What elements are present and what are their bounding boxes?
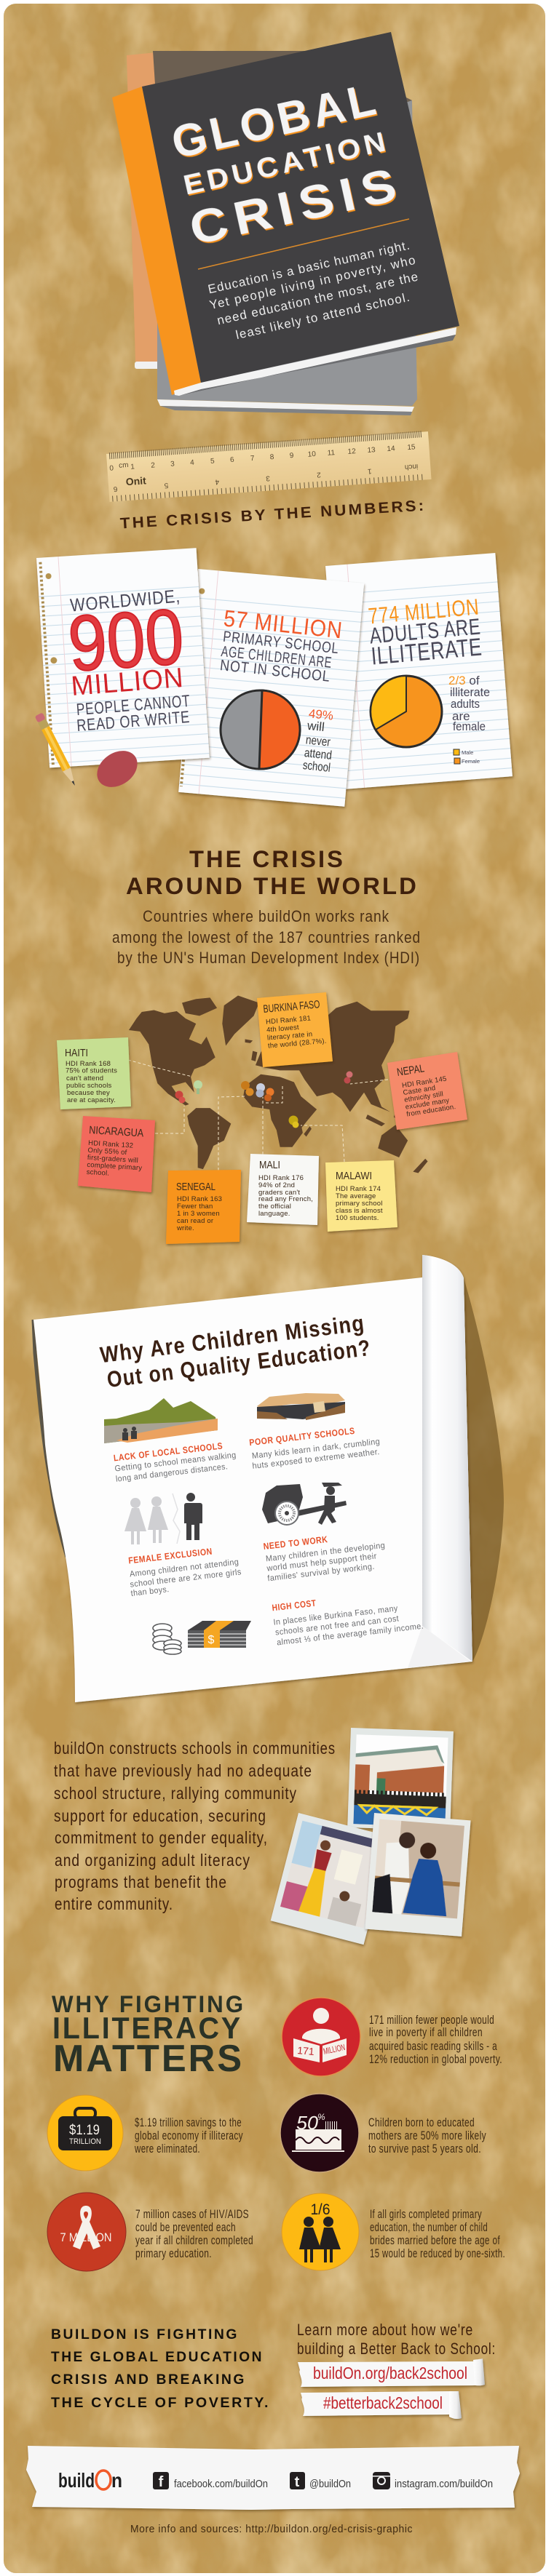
icon: briefcase: TRILLION xyxy=(69,2137,101,2146)
item: lack of local schools: Getting to school means walking xyxy=(114,1451,237,1473)
call to action: buildOn is fighting: THE CYCLE OF POVERTY. xyxy=(51,2396,270,2411)
facebook link: facebook.com/buildOn xyxy=(174,2478,268,2490)
facebook link xyxy=(153,2472,268,2490)
pie legend xyxy=(454,749,480,765)
item: need to work: families' survival by working. xyxy=(267,1563,375,1583)
sticky note: Haiti: are at capacity. xyxy=(67,1096,116,1104)
pie caption: never xyxy=(305,733,331,749)
heading: why fighting illiteracy matters: ILLITERACY xyxy=(52,2011,242,2045)
sticky note: Haiti: public schools xyxy=(66,1082,112,1090)
ruler: Onit xyxy=(125,474,147,487)
item: poor quality schools: POOR QUALITY SCHOOLS xyxy=(249,1426,355,1448)
heading: why fighting illiteracy matters: MATTERS xyxy=(53,2038,244,2080)
text block: what buildOn does: programs that benefit the xyxy=(55,1873,227,1891)
sticky note: Malawi: class is almost xyxy=(336,1207,383,1215)
item: female exclusion: than boys. xyxy=(130,1585,170,1598)
ruler: 6 xyxy=(230,456,234,464)
item: high cost xyxy=(153,1598,424,1654)
stat: $1.19 trillion xyxy=(47,2095,243,2171)
book title: GLOBAL xyxy=(167,74,384,168)
stat text xyxy=(367,594,483,671)
photo: school building xyxy=(347,1728,454,1831)
photo: girl in blue dress xyxy=(365,1813,471,1937)
stat: $1.19 trillion: $1.19 trillion savings to the xyxy=(135,2116,242,2129)
sticky note: Nepal: from education. xyxy=(406,1103,456,1119)
book subtitle: least likely to attend school. xyxy=(234,290,411,342)
sticky note: Burkina Faso: BURKINA FASO xyxy=(263,998,320,1016)
pie caption: 2/3 of xyxy=(448,674,480,687)
book title xyxy=(167,74,408,255)
front book xyxy=(112,32,459,396)
sticky note: Mali: HDI Rank 176 xyxy=(258,1174,304,1182)
stat text: WORLDWIDE, xyxy=(69,586,181,616)
back book: grey xyxy=(157,100,417,415)
sticky note: Senegal: 1 in 3 women xyxy=(177,1210,220,1218)
pie caption: adults xyxy=(451,697,480,711)
sticky note: Nepal: ethnicity still xyxy=(403,1090,444,1104)
book subtitle xyxy=(207,239,419,342)
facebook link: f xyxy=(159,2474,164,2490)
item: female exclusion: school there are 2x more girls xyxy=(130,1568,242,1590)
twitter link xyxy=(290,2472,351,2490)
book subtitle: Yet people living in poverty, who xyxy=(208,253,416,312)
sticky note: Senegal: SENEGAL xyxy=(176,1181,215,1193)
panel: why are children missing out xyxy=(33,1255,504,1702)
stat text: PRIMARY SCHOOL xyxy=(222,629,340,657)
stat text: 900 xyxy=(66,592,186,687)
ruler: inch xyxy=(405,462,419,471)
item: high cost: schools are not free and can cost xyxy=(274,1614,400,1638)
sticky note: Nicaragua: first-graders will xyxy=(87,1154,138,1165)
sheet heading: Why Are Children Missing xyxy=(98,1310,366,1368)
item: high cost: almost ⅓ of the average family income. xyxy=(277,1622,424,1647)
ruler: 12 xyxy=(347,447,357,456)
intro text: among the lowest of the 187 countries ranked xyxy=(112,928,421,946)
book subtitle: Education is a basic human right. xyxy=(207,239,411,296)
sticky note: Malawi: HDI Rank 174 xyxy=(336,1185,381,1193)
stat: 50 percent xyxy=(280,2094,486,2172)
text block: what buildOn does: entire community. xyxy=(55,1894,173,1913)
stat text: ADULTS ARE xyxy=(368,613,482,649)
pie caption: school xyxy=(302,758,331,775)
sticky note: Mali: MALI xyxy=(259,1159,280,1171)
stat text: READ OR WRITE xyxy=(76,707,191,735)
ruler: 3 xyxy=(265,474,270,482)
instagram link xyxy=(373,2472,493,2490)
pie caption: female xyxy=(453,719,486,733)
pie caption: will xyxy=(306,719,325,734)
stat: 171 million xyxy=(282,1998,502,2076)
sticky note: Nepal: HDI Rank 145 xyxy=(401,1075,447,1090)
banner: website: buildOn.org/back2school xyxy=(313,2364,467,2382)
intro text: Countries where buildOn works rank xyxy=(143,907,389,925)
logo: buildOn: n xyxy=(111,2469,122,2492)
intro text: by the UN's Human Development Index (HDI) xyxy=(117,949,420,967)
stat text: PEOPLE CANNOT xyxy=(76,691,191,719)
item: high cost: HIGH COST xyxy=(272,1598,317,1613)
text block: what buildOn does: that have previously had no adequate xyxy=(54,1761,312,1780)
sticky note: Haiti: can't attend xyxy=(66,1074,103,1082)
stat: 171 million: live in poverty if all children xyxy=(369,2026,483,2039)
stat: one sixth: If all girls completed primary xyxy=(370,2208,482,2221)
stat: 7 million: 7 million cases of HIV/AIDS xyxy=(135,2208,249,2221)
sticky note: Mali: the official xyxy=(258,1203,291,1211)
ruler: 11 xyxy=(327,449,336,458)
sticky note: Senegal: can read or xyxy=(177,1217,213,1225)
book subtitle: need education the most, are the xyxy=(215,270,419,327)
photo: classroom teacher xyxy=(271,1813,392,1945)
icon: briefcase xyxy=(47,2095,123,2171)
ruler: 8 xyxy=(270,453,274,461)
item: female exclusion xyxy=(124,1493,242,1598)
banner: hashtag xyxy=(301,2391,462,2419)
icon: reader with book xyxy=(282,1998,360,2076)
sticky note: Nepal xyxy=(387,1052,467,1130)
heading: why fighting illiteracy matters xyxy=(52,1991,245,2080)
sticky note: Nicaragua: HDI Rank 132 xyxy=(88,1139,133,1150)
item: need to work: Many children in the developing xyxy=(265,1542,386,1563)
icon: coins and cash xyxy=(153,1621,251,1654)
pie caption xyxy=(302,706,334,775)
sticky note: Haiti xyxy=(57,1037,131,1109)
sticky note: Malawi: primary school xyxy=(336,1200,383,1208)
intro text xyxy=(112,907,421,967)
sticky note: Haiti: because they xyxy=(67,1089,110,1097)
sticky note: Mali: read any French, xyxy=(258,1195,313,1203)
ruler: 0 xyxy=(109,464,114,473)
sources line: More info and sources: http://buildon.org/ed-crisis-graphic xyxy=(130,2523,413,2535)
icon: ribbon: 7 MILLION xyxy=(60,2230,112,2244)
stat text: MILLION xyxy=(70,663,185,702)
item: lack of local schools xyxy=(104,1398,237,1484)
icon: reader with book: 171 xyxy=(297,2044,315,2057)
book title: EDUCATION xyxy=(181,126,392,202)
sticky note: Mali: 94% of 2nd xyxy=(258,1181,295,1189)
stat text: ILLITERATE xyxy=(370,633,483,671)
sticky note: Nicaragua: school. xyxy=(86,1168,110,1178)
pie chart: never attend school xyxy=(221,690,300,769)
sticky note: Burkina Faso: HDI Rank 181 xyxy=(266,1014,311,1026)
sticky note: Burkina Faso: literacy rate in xyxy=(267,1030,313,1042)
ruler: 5 xyxy=(164,481,169,490)
ruler: 10 xyxy=(307,450,317,459)
sticky note: Senegal: HDI Rank 163 xyxy=(177,1195,222,1203)
stat text: NOT IN SCHOOL xyxy=(219,657,331,685)
back book: brown xyxy=(153,51,412,218)
note paper: 774 million xyxy=(325,553,513,789)
icon: birthday cake: 50 xyxy=(296,2112,319,2134)
stat text xyxy=(66,586,191,735)
sticky note: Nicaragua: NICARAGUA xyxy=(89,1124,144,1140)
stat: 7 million xyxy=(47,2193,253,2271)
item: female exclusion: Among children not attending xyxy=(129,1558,240,1579)
twitter link: @buildOn xyxy=(309,2478,351,2490)
stat: one sixth xyxy=(282,2193,505,2270)
item: poor quality schools xyxy=(249,1393,381,1471)
icon: birthday cake xyxy=(280,2094,359,2172)
sticky note: Malawi: The average xyxy=(336,1192,376,1200)
pie legend: Female xyxy=(462,758,480,765)
sticky note: Senegal xyxy=(166,1170,241,1244)
stat: one sixth: education, the number of child xyxy=(370,2221,488,2234)
sticky note: Malawi: MALAWI xyxy=(336,1170,372,1182)
icon: person pulling cart xyxy=(262,1483,347,1525)
stat text xyxy=(219,605,344,685)
text block: what buildOn does xyxy=(54,1739,336,1913)
sticky note: Haiti: HAITI xyxy=(65,1047,88,1059)
sticky note: Nicaragua: complete primary xyxy=(87,1161,143,1172)
item: high cost: In places like Burkina Faso, many xyxy=(273,1604,398,1627)
sticky note: Malawi xyxy=(325,1160,397,1232)
icon: eraser xyxy=(90,743,144,794)
world map xyxy=(129,996,428,1173)
item: lack of local schools: LACK OF LOCAL SCHOOLS xyxy=(113,1440,223,1464)
stat: 7 million: primary education. xyxy=(135,2247,212,2260)
ruler: 4 xyxy=(215,477,219,486)
sticky note: Nicaragua xyxy=(78,1116,155,1192)
ruler: 3 xyxy=(170,460,175,468)
text block: what buildOn does: buildOn constructs schools in communities xyxy=(54,1739,336,1758)
note paper: 900 million xyxy=(36,548,210,767)
sheet heading: Out on Quality Education? xyxy=(106,1335,372,1392)
stat: 171 million: acquired basic reading skills - a xyxy=(369,2040,497,2053)
sticky note: Malawi: 100 students. xyxy=(336,1214,379,1222)
stat: 50 percent: mothers are 50% more likely xyxy=(368,2129,486,2142)
heading: the crisis around the world xyxy=(126,846,419,899)
call to action: buildOn is fighting: CRISIS AND BREAKING xyxy=(51,2372,246,2388)
twitter link: t xyxy=(295,2474,300,2490)
sticky note: Nicaragua: Only 55% of xyxy=(87,1147,127,1157)
icon: birthday cake: % xyxy=(317,2112,325,2122)
ruler: 1 xyxy=(130,463,135,471)
text block: what buildOn does: commitment to gender equality, xyxy=(55,1828,268,1847)
ruler: 5 xyxy=(210,458,215,466)
stat: $1.19 trillion: global economy if illiteracy xyxy=(135,2129,243,2142)
ruler: 13 xyxy=(367,446,376,455)
ruler xyxy=(106,431,432,502)
sticky note: Senegal: write. xyxy=(176,1224,194,1232)
item: poor quality schools: Many kids learn in dark, crumbling xyxy=(252,1437,381,1461)
stat: 7 million: year if all children completed xyxy=(135,2234,253,2247)
heading: the crisis by the numbers: THE CRISIS BY THE NUMBERS: xyxy=(119,498,427,532)
pie caption xyxy=(448,674,490,733)
ruler: 2 xyxy=(316,471,321,479)
sticky note: Nepal: exclude many xyxy=(405,1096,450,1112)
call to action: buildOn is fighting: THE GLOBAL EDUCATION xyxy=(51,2350,264,2365)
sticky note: Burkina Faso: 4th lowest xyxy=(266,1024,299,1034)
instagram link: instagram.com/buildOn xyxy=(395,2478,493,2490)
pie legend: Male xyxy=(462,749,473,756)
sticky note: Senegal: Fewer than xyxy=(177,1203,213,1211)
map connector lines xyxy=(128,1060,388,1171)
text block: what buildOn does: school structure, rallying community xyxy=(54,1784,297,1803)
ruler: 1 xyxy=(367,467,372,475)
banner: hashtag: #betterback2school xyxy=(323,2393,443,2412)
item: need to work: NEED TO WORK xyxy=(263,1534,328,1552)
icon: crumbling hut xyxy=(257,1393,345,1420)
ruler: 6 xyxy=(113,485,118,493)
text: learn more: Learn more about how we're xyxy=(297,2321,473,2339)
stat: 50 percent: Children born to educated xyxy=(368,2116,475,2129)
sticky note: Nepal: NEPAL xyxy=(396,1062,425,1079)
item: need to work: world must help support their xyxy=(266,1552,377,1574)
text block: what buildOn does: and organizing adult literacy xyxy=(55,1851,250,1870)
pie caption: 49% xyxy=(308,706,334,723)
logo: buildOn: build xyxy=(58,2469,95,2492)
pie caption: attend xyxy=(304,746,333,762)
ruler: 14 xyxy=(387,444,395,453)
icon: child brides: 1/6 xyxy=(310,2201,331,2218)
icon: child brides xyxy=(282,2193,359,2270)
sticky note: Nepal: Caste and xyxy=(403,1084,436,1097)
heading: the crisis around the world: AROUND THE WORLD xyxy=(126,873,419,899)
sticky note: Haiti: 75% of students xyxy=(66,1066,117,1075)
icon: pencil xyxy=(35,712,79,788)
sticky note: Burkina Faso xyxy=(257,992,333,1067)
ruler: cm xyxy=(119,461,129,470)
sticky note: Burkina Faso: the world (28.7%). xyxy=(268,1037,327,1050)
stat: 171 million: 12% reduction in global poverty. xyxy=(369,2053,502,2066)
item: poor quality schools: huts exposed to extreme weather. xyxy=(252,1448,380,1471)
item: female exclusion: FEMALE EXCLUSION xyxy=(128,1546,213,1566)
text block: what buildOn does: support for education, securing xyxy=(54,1806,266,1825)
note paper: 57 million xyxy=(178,569,364,807)
ruler: 9 xyxy=(289,452,294,460)
ruler: 15 xyxy=(407,443,416,452)
item: need to work xyxy=(262,1483,386,1583)
stat: 50 percent: to survive past 5 years old. xyxy=(368,2142,481,2156)
footer tape with social links xyxy=(26,2446,520,2510)
sticky note: Haiti: HDI Rank 168 xyxy=(66,1060,111,1068)
icon: coins and cash: $ xyxy=(208,1634,215,1646)
sticky note: Mali: language. xyxy=(258,1210,290,1218)
sheet heading xyxy=(98,1310,372,1392)
text: learn more: building a Better Back to School: xyxy=(297,2340,496,2358)
icon: ribbon xyxy=(47,2193,126,2271)
back book: peach xyxy=(127,52,164,369)
book title: CRISIS xyxy=(185,157,408,255)
ruler: 4 xyxy=(190,459,195,467)
stat: 7 million: could be prevented each xyxy=(135,2221,236,2234)
text: learn more xyxy=(297,2321,496,2358)
sticky note: Mali: graders can't xyxy=(258,1189,300,1197)
icon: landscape xyxy=(104,1398,218,1443)
call to action: buildOn is fighting xyxy=(51,2327,270,2411)
heading: the crisis around the world: THE CRISIS xyxy=(189,846,345,872)
pie chart: illiterate adults xyxy=(371,676,442,747)
map pins xyxy=(175,1071,352,1128)
book stack with title xyxy=(112,32,459,415)
sticky note: Mali xyxy=(247,1154,319,1225)
stat: 171 million: 171 million fewer people would xyxy=(369,2014,494,2027)
stat: $1.19 trillion: were eliminated. xyxy=(134,2142,200,2156)
item: lack of local schools: long and dangerous distances. xyxy=(115,1462,229,1484)
stat text: AGE CHILDREN ARE xyxy=(221,643,333,671)
pie caption: are xyxy=(452,709,470,723)
icon: reader with book: MILLION xyxy=(323,2042,346,2057)
banner: website xyxy=(298,2358,485,2387)
stat text: 57 MILLION xyxy=(223,605,344,643)
icon: briefcase: $1.19 xyxy=(69,2123,100,2138)
pie caption: illiterate xyxy=(450,685,490,699)
call to action: buildOn is fighting: BUILDON IS FIGHTING xyxy=(51,2327,239,2342)
curled paper sheet xyxy=(33,1255,504,1702)
stat text: 774 MILLION xyxy=(367,594,480,629)
icon: two women and a man xyxy=(124,1493,202,1544)
ruler: 2 xyxy=(151,461,156,470)
ruler: 7 xyxy=(250,455,255,463)
heading: why fighting illiteracy matters: WHY FIGHTING xyxy=(52,1991,245,2017)
